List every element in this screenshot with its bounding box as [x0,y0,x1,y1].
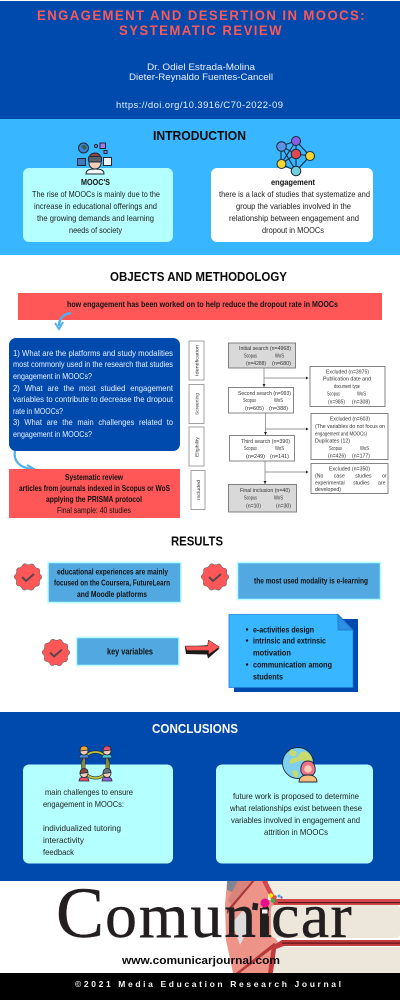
flow box: excluded by date and type: WoS [357,392,366,398]
flow box: initial search: (n=680) [272,361,291,367]
flow box: excluded by date and type: document type [334,384,360,390]
flow box: second search: Second search (n=993) [238,391,291,397]
flow box: third search: Scopus [244,446,257,452]
arrow: key variables to list [185,640,220,658]
card: MOOCs [23,168,173,242]
banner: research aim: how engagement has been worked on to help reduce the dropout rate in MOOCs [67,299,338,309]
card: main challenges: individualized tutoring [43,823,121,833]
flow box: excluded by focus: (n=426) [328,454,346,460]
note: variable list: motivation [253,648,291,658]
flow box: excluded by focus [311,414,388,460]
panel: systematic review: Final sample: 40 studies [57,505,131,515]
authors [129,62,273,83]
logo: Comunicar: omun [105,880,258,951]
result box: platforms: and Moodle platforms [77,589,147,599]
panel: research questions: most commonly used in the research that studies [13,359,173,369]
flow box: excluded by study type: developed) [315,487,341,493]
flow box: excluded by focus: (The variables do not focus on [315,424,385,430]
card: MOOCs: The rise of MOOCs is mainly due to the [32,189,160,199]
panel: research questions [9,338,180,451]
doi link: https://doi.org/10.3916/C70-2022-09 [116,100,283,111]
flow box: final inclusion: (n=10) [246,504,261,510]
logo: Comunicar: i [260,898,272,947]
photo: stack of books [225,881,400,973]
flow box: initial search: WoS [275,354,284,360]
card: engagement: relationship between engagement and [229,213,359,223]
flow box: final inclusion: (n=30) [276,504,291,510]
result box: key variables: key variables [107,646,153,658]
card: main challenges: main challenges to ensure [45,787,133,797]
panel: research questions: engagement in MOOCs? [13,429,92,439]
title: SYSTEMATIC REVIEW [119,22,283,38]
PRISMA stage labels: Eligibility [194,436,200,457]
icon: check badge two [202,564,228,590]
flow box: excluded by focus: Duplicates (12) [315,438,350,444]
flow box: excluded by date and type: Scopus [327,392,340,398]
flow box: excluded by focus: Scopus [329,446,342,452]
panel: systematic review: articles from journals indexed in Scopus or WoS [19,483,170,493]
flow box: final inclusion: Scopus [244,496,257,502]
flow box: excluded by focus: engagement and MOOCs) [315,432,367,438]
flow box: excluded by study type: Excluded (n=350) [329,466,370,472]
heading: introduction: INTRODUCTION [153,128,246,143]
card: main challenges [23,764,173,864]
card: engagement: group the variables involved in the [236,201,351,211]
icon: globe and person [282,748,317,782]
note: variable list [229,614,358,692]
result box: platforms: focused on the Coursera, FutureLearn [54,578,170,588]
heading: objects and methodology: OBJECTS AND METHODOLOGY [110,269,287,284]
card: main challenges: engagement in MOOCs: [43,799,124,809]
card: engagement: there is a lack of studies that systematize and [219,189,370,199]
panel: header [0,1,400,119]
card: future work [216,764,373,864]
card: future work: future work is proposed to determine [233,791,359,801]
result box: modality [238,562,380,600]
icon: VR learner [78,143,112,174]
note: variable list: students [253,672,283,682]
panel: conclusions [0,712,400,881]
flow box: final inclusion [228,484,296,512]
heading: results: RESULTS [171,534,223,548]
result box: platforms: educational experiences are mainly [57,566,168,576]
result box: key variables [76,638,179,666]
panel: research questions: 1) What are the platforms and study modalities [13,348,173,358]
title [37,7,366,38]
flow box: third search: (n=249) [246,454,265,460]
panel: introduction [0,119,400,255]
arrow: questions to review [15,451,34,472]
flow box: second search [228,388,294,413]
card: MOOCs: the growing demands and learning [37,213,154,223]
card: main challenges: feedback [43,847,75,857]
flow box: excluded by date and type: Excluded (n=3975) [326,370,369,376]
logo: Comunicar [56,873,353,953]
panel: research questions: engagement in MOOCs? [13,371,92,381]
flow box: excluded by focus: Excluded (n=603) [330,416,370,422]
note: variable list: intrinsic and extrinsic [253,636,326,646]
flow box: excluded by focus: WoS [360,446,369,452]
flow box: second search: (n=605) [245,406,264,412]
flow box: excluded by study type [311,464,388,494]
card: future work: variables involved in engagement and [231,815,360,825]
flow box: excluded by date and type [310,366,385,406]
PRISMA stage labels: Identification [194,345,200,376]
flow box: initial search: (n=4288) [246,361,266,367]
card: MOOCs: MOOC'S [81,177,110,187]
footer bar: ©2021 Media Education Research Journal [75,979,341,989]
flow box: excluded by date and type: (n=308) [352,400,370,406]
flow box: third search: WoS [275,446,284,452]
flow box: second search: Scopus [243,398,256,404]
panel: systematic review: applying the PRISMA protocol [46,494,142,504]
flow box: excluded by date and type: (n=985) [328,400,345,406]
icon: connected people [79,746,112,781]
flow box: initial search: Scopus [244,354,257,360]
PRISMA flow diagram [228,343,388,512]
footer bar [0,973,400,1000]
title: ENGAGEMENT AND DESERTION IN MOOCS: [37,7,366,23]
note: variable list: communication among [253,660,332,670]
panel: research questions: 2) What are the most studied engagement [13,383,174,393]
flow box: initial search: Initial search (n=4968) [239,346,291,352]
icon: network [277,136,314,176]
flow box: excluded by focus: (n=177) [352,454,370,460]
flow box: excluded by study type: (No case studies or [315,474,387,480]
PRISMA stage labels: Screening [194,393,200,415]
flow box: final inclusion: Final inclusion (n=40) [240,488,290,494]
icon: check badge three [43,640,69,665]
banner: research aim [18,293,382,320]
card: engagement: engagement [271,177,315,187]
flow box: second search: WoS [274,398,283,404]
flow box: third search: Third search (n=390) [241,439,290,445]
result box: platforms [48,562,181,602]
authors: Dieter-Reynaldo Fuentes-Cancell [129,72,273,83]
flow box: initial search [228,343,296,368]
result box: modality: the most used modality is e-learning [254,576,368,586]
icon: check badge one [15,564,41,590]
flow box: excluded by date and type: Publication date and [323,376,371,382]
flow box: final inclusion: WoS [274,496,283,502]
card: main challenges: interactivity [43,835,85,845]
heading: conclusions: CONCLUSIONS [152,721,238,736]
card: future work: attrition in MOOCs [264,827,328,837]
card: future work: what relationships exist between these [229,803,362,813]
flow box: second search: (n=388) [269,406,288,412]
logo: Comunicar: C [56,873,104,953]
authors: Dr. Odiel Estrada-Molina [147,62,256,73]
panel: research questions: 3) What are the main challenges related to [13,417,173,427]
flow box: excluded by study type: experimental studies are [315,480,386,486]
panel: research questions: variables to contribute to decrease the dropout [13,394,174,404]
note: variable list: e-activities design [253,624,314,634]
card: engagement: dropout in MOOCs [262,225,324,235]
PRISMA stage labels: Included [196,480,202,500]
website link: www.comunicarjournal.com [121,955,280,967]
card: MOOCs: needs of society [69,225,123,235]
arrow: aim to questions [55,313,71,329]
PRISMA stage labels [189,341,205,510]
panel: research questions: rate in MOOCs? [13,406,63,416]
panel: systematic review: Systematic review [65,472,123,482]
panel: systematic review [9,469,180,518]
card: engagement [211,168,373,242]
card: MOOCs: increase in educational offerings and [34,201,157,211]
logo: Comunicar: car [271,880,353,951]
flow box: third search: (n=141) [270,454,289,460]
flow box: third search [230,436,294,461]
